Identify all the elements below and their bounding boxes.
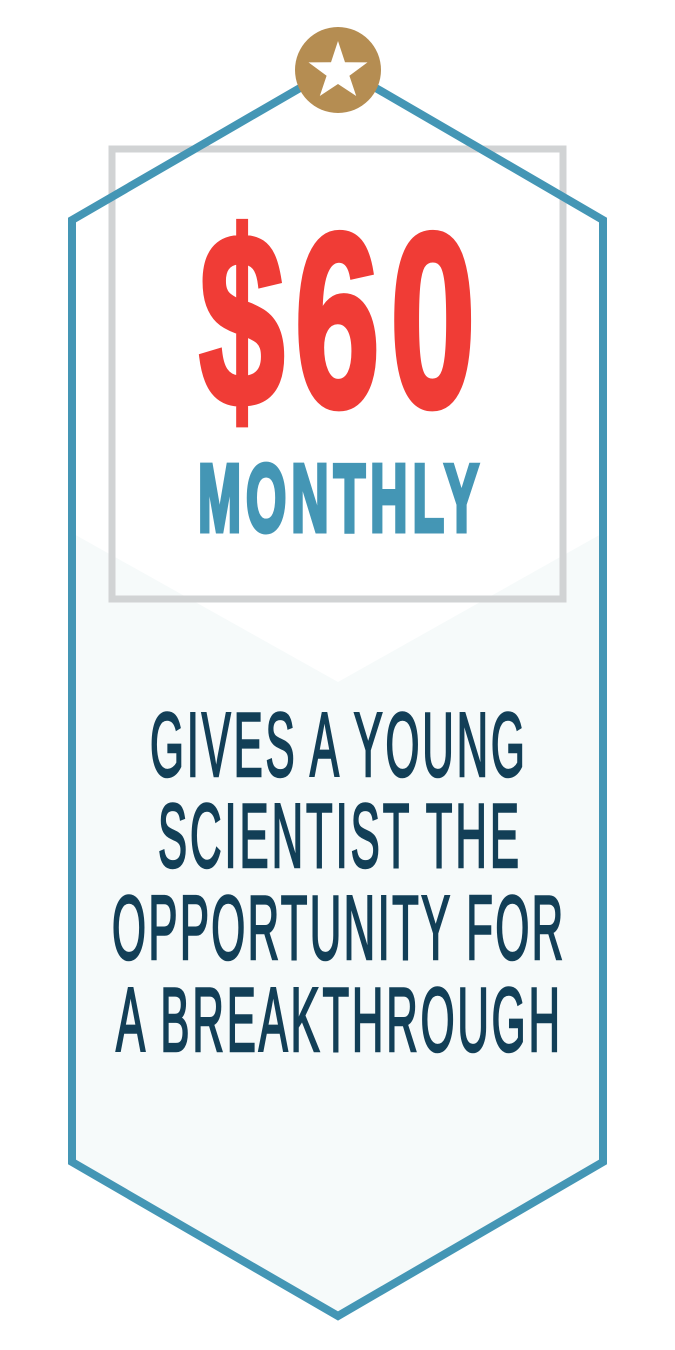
text block: description: GIVES A YOUNG: [150, 694, 525, 796]
panel: pale lower chevron fill: [72, 533, 603, 1316]
icon: star badge: [295, 27, 381, 113]
heading: monthly: MONTHLY: [198, 445, 479, 552]
text block: description: SCIENTIST THE: [158, 785, 519, 887]
hexagon outline: [72, 66, 603, 1316]
grey square frame: [112, 149, 563, 599]
text block: description: [112, 694, 563, 1071]
amount: $60: $60: [199, 181, 476, 459]
text block: description: A BREAKTHROUGH: [116, 969, 560, 1071]
text block: description: OPPORTUNITY FOR: [112, 877, 563, 979]
